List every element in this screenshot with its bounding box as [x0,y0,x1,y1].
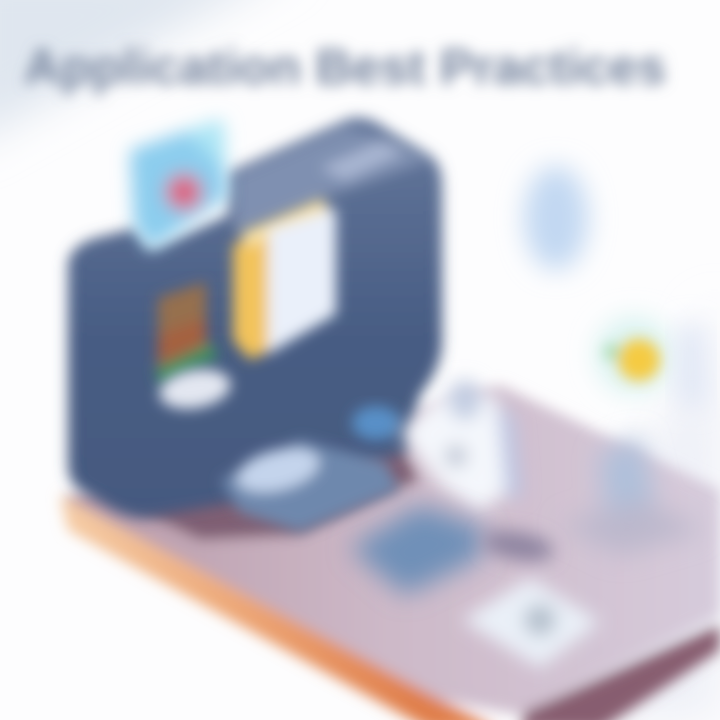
floating blue badge [130,120,228,250]
yellow card side [233,222,272,360]
pale right panel [678,325,704,405]
title: Application Best Practices [24,39,666,95]
white oval control [156,364,234,414]
phone device [400,380,522,512]
platform orange edge [60,495,500,720]
keyboard [220,440,400,532]
monitor body [68,117,442,518]
platform shadow under monitor [130,440,420,540]
floating blue drop [524,166,588,270]
lamp stand [560,435,705,555]
monitor top highlight [235,128,430,232]
blue floor mat [350,505,485,595]
floating yellow badge [596,317,672,393]
red dot [166,174,202,210]
platform top surface [62,385,720,715]
platform maroon edge [520,625,720,720]
tile dot [524,604,556,636]
floor white tile [462,578,600,668]
yellow dot [604,339,660,381]
white card face [268,208,336,354]
screen: document card [233,198,336,360]
platform [60,385,720,720]
dark shadow pad [480,526,556,566]
orange green chart panel [155,282,218,385]
blue glow button [352,406,400,440]
phone dot [445,445,467,467]
